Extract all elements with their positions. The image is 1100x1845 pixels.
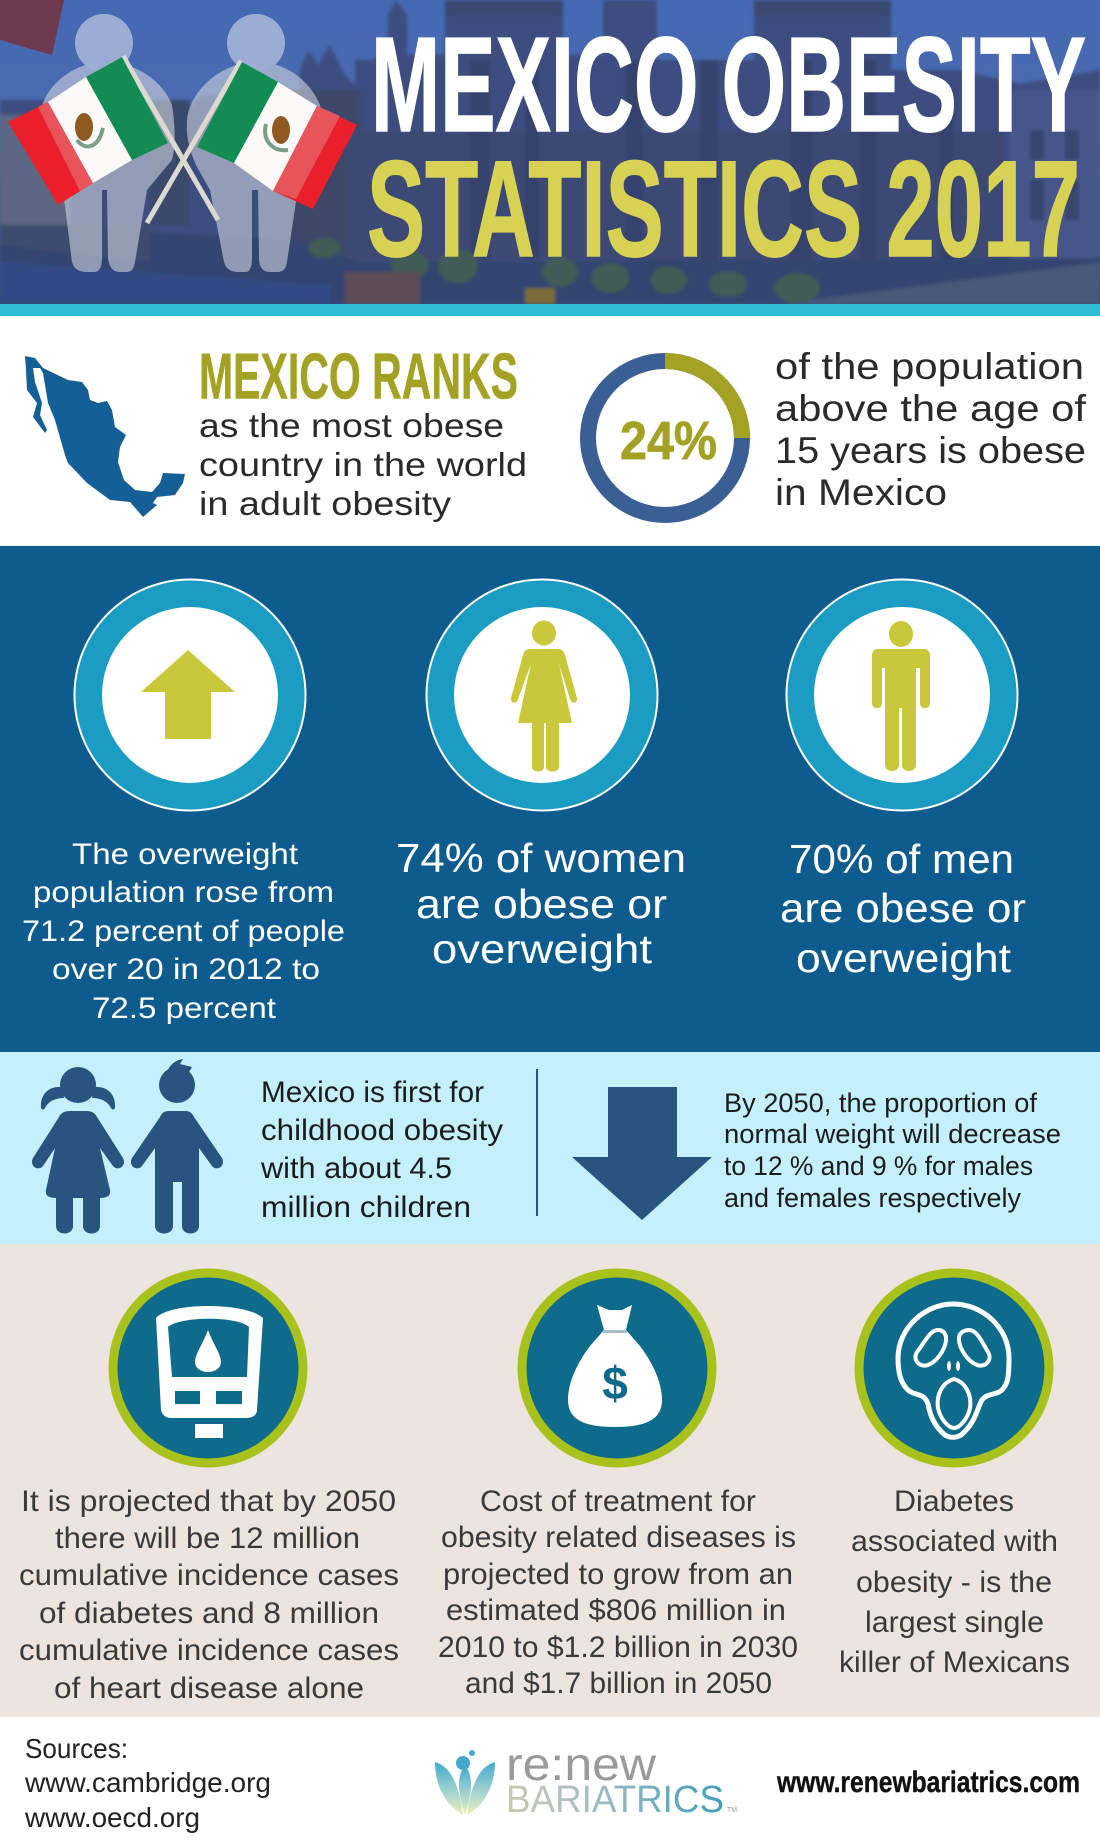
text: cost of treatment: estimated $806 million in [446, 1594, 786, 1627]
logo: re:new Bariatrics: BARIATRICS [506, 1779, 724, 1821]
text: 74 percent of women: 74% of women [396, 835, 686, 881]
left flag [8, 57, 168, 205]
text: overweight population rose: 71.2 percent of people [22, 915, 345, 948]
icon: girl and boy [32, 1059, 223, 1234]
text: diabetes and heart disease [19, 1485, 399, 1705]
text: most obese country: country in the world [199, 446, 527, 483]
text: overweight population rose: population rose from [33, 876, 334, 909]
text: most obese country: in adult obesity [199, 485, 452, 522]
panel: health and cost projections [0, 1244, 1100, 1717]
icon: up arrow in circle [74, 580, 306, 810]
text: 74 percent of women: overweight [432, 926, 653, 972]
icon: crossed Mexican flags [8, 56, 357, 223]
icon: money bag [522, 1273, 712, 1463]
text: cost of treatment [438, 1485, 798, 1700]
text: overweight population rose: over 20 in 2012 to [52, 953, 320, 986]
text: diabetes and heart disease: cumulative incidence cases [19, 1634, 399, 1667]
icon: down arrow [572, 1087, 712, 1220]
text: diabetes largest killer: largest single [865, 1606, 1044, 1639]
logo: re:new Bariatrics: TM [727, 1807, 737, 1814]
text: most obese country: as the most obese [199, 407, 504, 444]
text: cost of treatment: 2010 to $1.2 billion in 2030 [438, 1631, 798, 1664]
donut chart: 24 percent [588, 361, 742, 515]
text: first for childhood obesity: million children [261, 1191, 471, 1224]
panel: overweight statistics [0, 546, 1100, 1052]
header banner [0, 0, 1100, 304]
text: sources [24, 1733, 271, 1833]
text: 70 percent of men: 70% of men [789, 836, 1014, 882]
text: population above 15 [775, 346, 1087, 513]
text: cost of treatment: Cost of treatment for [480, 1485, 756, 1518]
panel: childhood and forecast [0, 1052, 1100, 1244]
logo: re:new Bariatrics [435, 1738, 737, 1821]
text: diabetes and heart disease: there will be 12 million [55, 1522, 360, 1555]
text: first for childhood obesity: Mexico is first for [261, 1076, 484, 1109]
text: 74 percent of women [396, 835, 686, 972]
text: most obese country [199, 407, 527, 522]
cathedral photo background [0, 0, 1100, 304]
text: 2050 normal weight projection: and females respectively [724, 1183, 1021, 1213]
text: 70 percent of men: overweight [796, 935, 1012, 981]
text: diabetes and heart disease: cumulative incidence cases [19, 1559, 399, 1592]
text: population above 15: of the population [775, 346, 1084, 387]
text: overweight population rose: The overweight [72, 838, 299, 871]
text: first for childhood obesity [260, 1076, 503, 1224]
title [367, 9, 1086, 286]
text: 2050 normal weight projection: to 12 % and 9 % for males [724, 1151, 1033, 1181]
panel: ranking and 24 percent [25, 340, 1087, 522]
icon: scream mask [859, 1273, 1049, 1463]
icon: man in circle [786, 580, 1018, 810]
text: diabetes and heart disease: It is projected that by 2050 [21, 1485, 396, 1518]
text: overweight population rose [22, 838, 345, 1025]
decorative flag corner [0, 0, 64, 55]
text: sources: Sources: [25, 1733, 128, 1764]
icon: glucose meter [113, 1273, 303, 1463]
text: 2050 normal weight projection [724, 1088, 1061, 1213]
icon: overweight people silhouettes [42, 14, 323, 272]
text: population above 15: in Mexico [775, 472, 947, 513]
text: sources: www.oecd.org [24, 1802, 200, 1833]
text: 70 percent of men: are obese or [780, 885, 1026, 931]
text: cost of treatment: and $1.7 billion in 2050 [465, 1667, 772, 1700]
text: diabetes largest killer [839, 1485, 1070, 1679]
heading: Mexico ranks: MEXICO RANKS [199, 340, 518, 412]
text: population above 15: 15 years is obese [775, 430, 1086, 471]
text: cost of treatment: projected to grow from an [443, 1558, 793, 1591]
icon: woman in circle [426, 580, 658, 810]
text: diabetes largest killer: obesity - is the [856, 1566, 1052, 1599]
icon: map of Mexico [25, 356, 185, 517]
text: 70 percent of men [780, 836, 1026, 981]
text: diabetes largest killer: Diabetes [894, 1485, 1014, 1518]
logo: re:new Bariatrics: re:new [506, 1738, 657, 1790]
cyan divider band [0, 304, 1100, 316]
icon: money bag: $ [602, 1357, 628, 1409]
text: first for childhood obesity: with about 4.5 [260, 1152, 452, 1185]
text: diabetes and heart disease: of diabetes and 8 million [39, 1597, 379, 1630]
text: overweight population rose: 72.5 percent [92, 992, 277, 1025]
text: 2050 normal weight projection: normal weight will decrease [724, 1119, 1061, 1149]
text: diabetes and heart disease: of heart disease alone [54, 1672, 364, 1705]
right flag [197, 62, 357, 209]
text: 2050 normal weight projection: By 2050, the proportion of [724, 1088, 1037, 1118]
text: first for childhood obesity: childhood obesity [261, 1114, 503, 1147]
text: sources: www.cambridge.org [24, 1767, 271, 1798]
donut chart: 24 percent: 24% [620, 411, 717, 471]
text: cost of treatment: obesity related diseases is [441, 1521, 796, 1554]
text: diabetes largest killer: associated with [851, 1525, 1058, 1558]
footer [24, 1733, 1080, 1833]
text: diabetes largest killer: killer of Mexicans [839, 1646, 1070, 1679]
text: 74 percent of women: are obese or [416, 881, 667, 927]
text: population above 15: above the age of [775, 388, 1087, 429]
